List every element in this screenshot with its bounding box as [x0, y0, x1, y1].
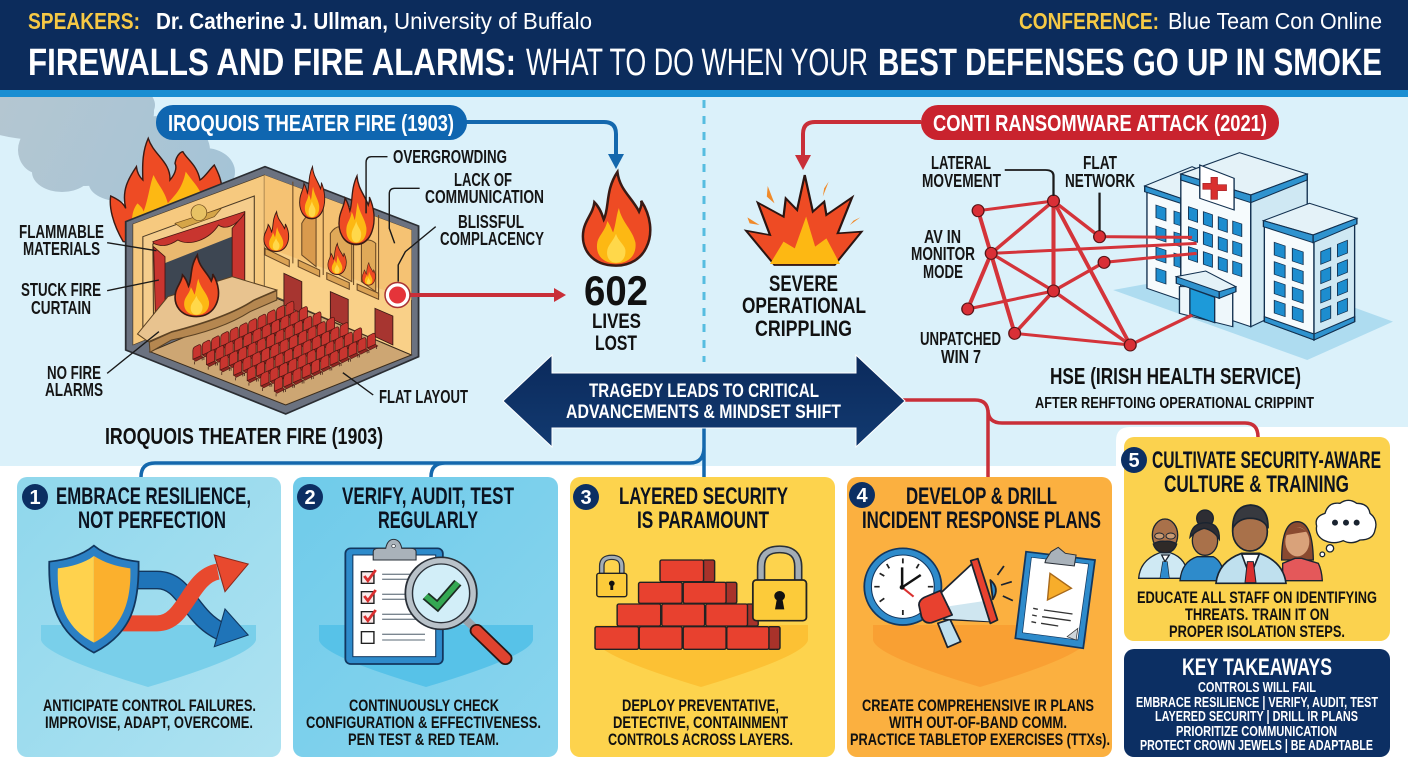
label: AV in monitor mode: AV IN: [924, 227, 961, 247]
badge 3: 3: [580, 487, 592, 509]
heading: [1152, 447, 1381, 498]
label: stuck fire curtain: STUCK FIRE: [21, 280, 101, 300]
connector: Iroquois to lives lost: [466, 122, 624, 169]
label: lack of communication: LACK OF: [454, 170, 512, 190]
body: CREATE COMPREHENSIVE IR PLANS: [862, 697, 1094, 715]
body: IMPROVISE, ADAPT, OVERCOME.: [45, 714, 253, 732]
label: lack of communication: [425, 170, 544, 207]
label: unpatched win 7: [920, 329, 1001, 367]
dark stage: [164, 237, 232, 322]
title: [28, 42, 1382, 84]
label: flat network: FLAT: [1083, 153, 1117, 173]
body: [306, 697, 541, 749]
theater caption: IROQUOIS THEATER FIRE (1903): [105, 423, 383, 449]
network diagram: [962, 170, 1197, 351]
network labels: [911, 153, 1135, 367]
icon: shield with arrows: [49, 546, 248, 653]
icon: big flame: [583, 172, 650, 266]
network nodes: [962, 195, 1136, 351]
small lock: [597, 557, 627, 597]
HSE caption: AFTER REHFTOING OPERATIONAL CRIPPINT: [1035, 395, 1314, 412]
smoke cloud: [0, 97, 235, 202]
body: DEPLOY PREVENTATIVE,: [622, 697, 779, 715]
heading: EMBRACE RESILIENCE,: [56, 483, 251, 510]
thought bubble: [1316, 500, 1376, 557]
speakers line: SPEAKERS:: [28, 8, 140, 34]
label: blissful complacency: [440, 212, 544, 249]
body: WITH OUT-OF-BAND COMM.: [889, 714, 1067, 732]
badge 5: 5: [1128, 450, 1140, 472]
conference line: CONFERENCE:: [1019, 8, 1159, 34]
right wall: [264, 175, 411, 355]
label: flammable materials: FLAMMABLE: [19, 222, 104, 242]
body: PEN TEST & RED TEAM.: [348, 731, 499, 749]
pill: Conti ransomware: CONTI RANSOMWARE ATTACK (2021): [933, 110, 1267, 136]
header band: [0, 0, 1408, 97]
connector: alarm to lives lost: [408, 288, 566, 302]
icon: roof flames: [110, 138, 222, 243]
label: overgrowding: OVERGROWDING: [393, 147, 507, 167]
divider: [702, 100, 706, 362]
illustration: theater cutaway: [107, 138, 436, 414]
speakers line: University of Buffalo: [394, 8, 592, 34]
label: severe operational crippling: [742, 271, 866, 341]
icon: explosion: [746, 175, 862, 265]
network links: [968, 201, 1197, 345]
curtains: [153, 212, 245, 327]
icon: stage flame: [175, 255, 219, 317]
right wing: [1263, 203, 1357, 340]
heading: VERIFY, AUDIT, TEST: [342, 483, 514, 510]
icon: brick wall and locks: [595, 549, 806, 649]
body: PRACTICE TABLETOP EXERCISES (TTXs).: [850, 731, 1110, 749]
doors: [284, 273, 393, 345]
label: no fire alarms: NO FIRE: [47, 363, 101, 383]
icon: clock, megaphone, clipboard: [864, 547, 1095, 648]
body: [43, 697, 256, 732]
panel: key takeaways: KEY TAKEAWAYS: [1182, 654, 1332, 681]
body: CONTROLS ACROSS LAYERS.: [608, 731, 793, 749]
heading: [56, 483, 251, 534]
label: blissful complacency: BLISSFUL: [458, 212, 524, 232]
card 1: embrace resilience: [17, 477, 281, 757]
label: flat network: NETWORK: [1065, 171, 1135, 191]
title: WHAT TO DO WHEN YOUR: [526, 42, 868, 84]
label: unpatched win 7: WIN 7: [941, 347, 981, 367]
left wall: [133, 175, 264, 345]
badge 5: [1121, 447, 1147, 473]
label: lack of communication: COMMUNICATION: [425, 187, 544, 207]
heading: [862, 483, 1101, 534]
body: PROPER ISOLATION STEPS.: [1169, 623, 1345, 641]
body: CONTINUOUSLY CHECK: [349, 697, 499, 715]
icon: alarm marker: [385, 282, 410, 308]
double arrow banner: ADVANCEMENTS & MINDSET SHIFT: [566, 402, 841, 423]
conference line: Blue Team Con Online: [1168, 8, 1382, 34]
body: CONFIGURATION & EFFECTIVENESS.: [306, 714, 541, 732]
body: [608, 697, 793, 749]
icon: staff group with thought bubble: [1139, 500, 1376, 583]
heading: DEVELOP & DRILL: [906, 483, 1057, 510]
label: lateral movement: LATERAL: [931, 153, 991, 173]
label: no fire alarms: [45, 363, 103, 400]
badge 3: [573, 484, 599, 510]
balconies and arches: [265, 182, 379, 299]
badge 2: [297, 484, 323, 510]
label: stuck fire curtain: [21, 280, 101, 318]
heading: IS PARAMOUNT: [637, 507, 769, 534]
card 4: incident response: [847, 477, 1112, 757]
conference line: [1019, 8, 1382, 34]
heading: [342, 483, 514, 534]
label: severe operational crippling: CRIPPLING: [755, 316, 852, 341]
label: lateral movement: [922, 153, 1001, 191]
pill: Iroquois theater: IROQUOIS THEATER FIRE (1903): [168, 110, 454, 136]
stat: 602 lives lost: [584, 267, 648, 355]
clipboard: [1015, 547, 1095, 648]
label: severe operational crippling: OPERATIONAL: [742, 293, 866, 318]
stat: 602 lives lost: LOST: [595, 332, 637, 355]
title: FIREWALLS AND FIRE ALARMS:: [28, 42, 516, 84]
network leaders: [1005, 170, 1100, 231]
card 5: security culture: [1121, 437, 1390, 641]
person 4: [1282, 522, 1322, 581]
icon: checklist and magnifier: [345, 539, 505, 664]
body: [1137, 589, 1377, 641]
bricks: [595, 560, 780, 649]
label: stuck fire curtain: CURTAIN: [31, 298, 91, 318]
HSE caption: HSE (IRISH HEALTH SERVICE): [1050, 363, 1301, 389]
label: unpatched win 7: UNPATCHED: [920, 329, 1001, 349]
clock: [864, 548, 941, 625]
connector: red branches: [900, 400, 1258, 477]
heading: REGULARLY: [378, 507, 478, 534]
HSE caption: [1035, 363, 1314, 412]
connector: blue branches: [141, 425, 704, 477]
body: [850, 697, 1110, 749]
label: no fire alarms: ALARMS: [45, 380, 103, 400]
proscenium: [143, 196, 254, 333]
body: THREATS. TRAIN IT ON: [1185, 606, 1329, 624]
badge 4: 4: [856, 485, 868, 507]
label: AV in monitor mode: [911, 227, 975, 282]
pill: Iroquois theater: [156, 105, 467, 140]
card 3: layered security: [570, 477, 835, 757]
person 3: [1216, 505, 1286, 583]
label: AV in monitor mode: MODE: [923, 262, 963, 282]
card 2: verify audit test: [293, 477, 558, 757]
label: lateral movement: MOVEMENT: [922, 171, 1001, 191]
shell: [126, 167, 419, 414]
ornament: [175, 205, 221, 228]
panel: key takeaways: [1124, 649, 1390, 757]
heading: LAYERED SECURITY: [619, 483, 788, 510]
illustration: hospital: [1113, 153, 1393, 360]
windows: [1156, 205, 1347, 323]
badge 1: 1: [29, 487, 41, 509]
label: flat layout: FLAT LAYOUT: [379, 387, 468, 407]
theater labels: [19, 147, 544, 407]
panel background: [0, 97, 1408, 466]
big lock: [753, 549, 806, 621]
stat: 602 lives lost: 602: [584, 267, 648, 314]
label: flammable materials: [19, 222, 104, 259]
person 2: [1180, 510, 1225, 581]
heading: INCIDENT RESPONSE PLANS: [862, 507, 1101, 534]
heading: [619, 483, 788, 534]
floor: [150, 298, 411, 405]
double arrow banner: TRAGEDY LEADS TO CRITICAL: [589, 381, 819, 402]
body: ANTICIPATE CONTROL FAILURES.: [43, 697, 256, 715]
label: AV in monitor mode: MONITOR: [911, 244, 975, 264]
pill: Conti ransomware: [921, 105, 1279, 140]
badge 2: 2: [304, 487, 316, 509]
label: flat network: [1065, 153, 1135, 191]
body: DETECTIVE, CONTAINMENT: [613, 714, 788, 732]
leader lines: [107, 157, 436, 395]
megaphone: [919, 559, 1013, 647]
sign: [1200, 165, 1234, 210]
double arrow banner: [503, 355, 905, 447]
icon: wall flames: [264, 167, 375, 285]
label: severe operational crippling: SEVERE: [769, 271, 838, 296]
heading: NOT PERFECTION: [78, 507, 226, 534]
panel: key takeaways: PRIORITIZE COMMUNICATION: [1176, 724, 1337, 740]
stage: [137, 277, 277, 342]
connector: Conti to crippling: [795, 122, 921, 170]
panel: key takeaways: CONTROLS WILL FAIL: [1198, 680, 1316, 696]
seating block: [193, 301, 378, 396]
person 1: [1139, 519, 1188, 578]
entrance: [1176, 271, 1236, 327]
left wing: [1145, 167, 1219, 300]
center tower: [1181, 153, 1307, 327]
label: flammable materials: MATERIALS: [23, 239, 100, 259]
badge 4: [849, 482, 875, 508]
speakers line: [28, 8, 592, 34]
badge 1: [22, 484, 48, 510]
stat: 602 lives lost: LIVES: [592, 310, 641, 333]
speakers line: Dr. Catherine J. Ullman,: [156, 8, 388, 34]
label: blissful complacency: COMPLACENCY: [440, 229, 544, 249]
